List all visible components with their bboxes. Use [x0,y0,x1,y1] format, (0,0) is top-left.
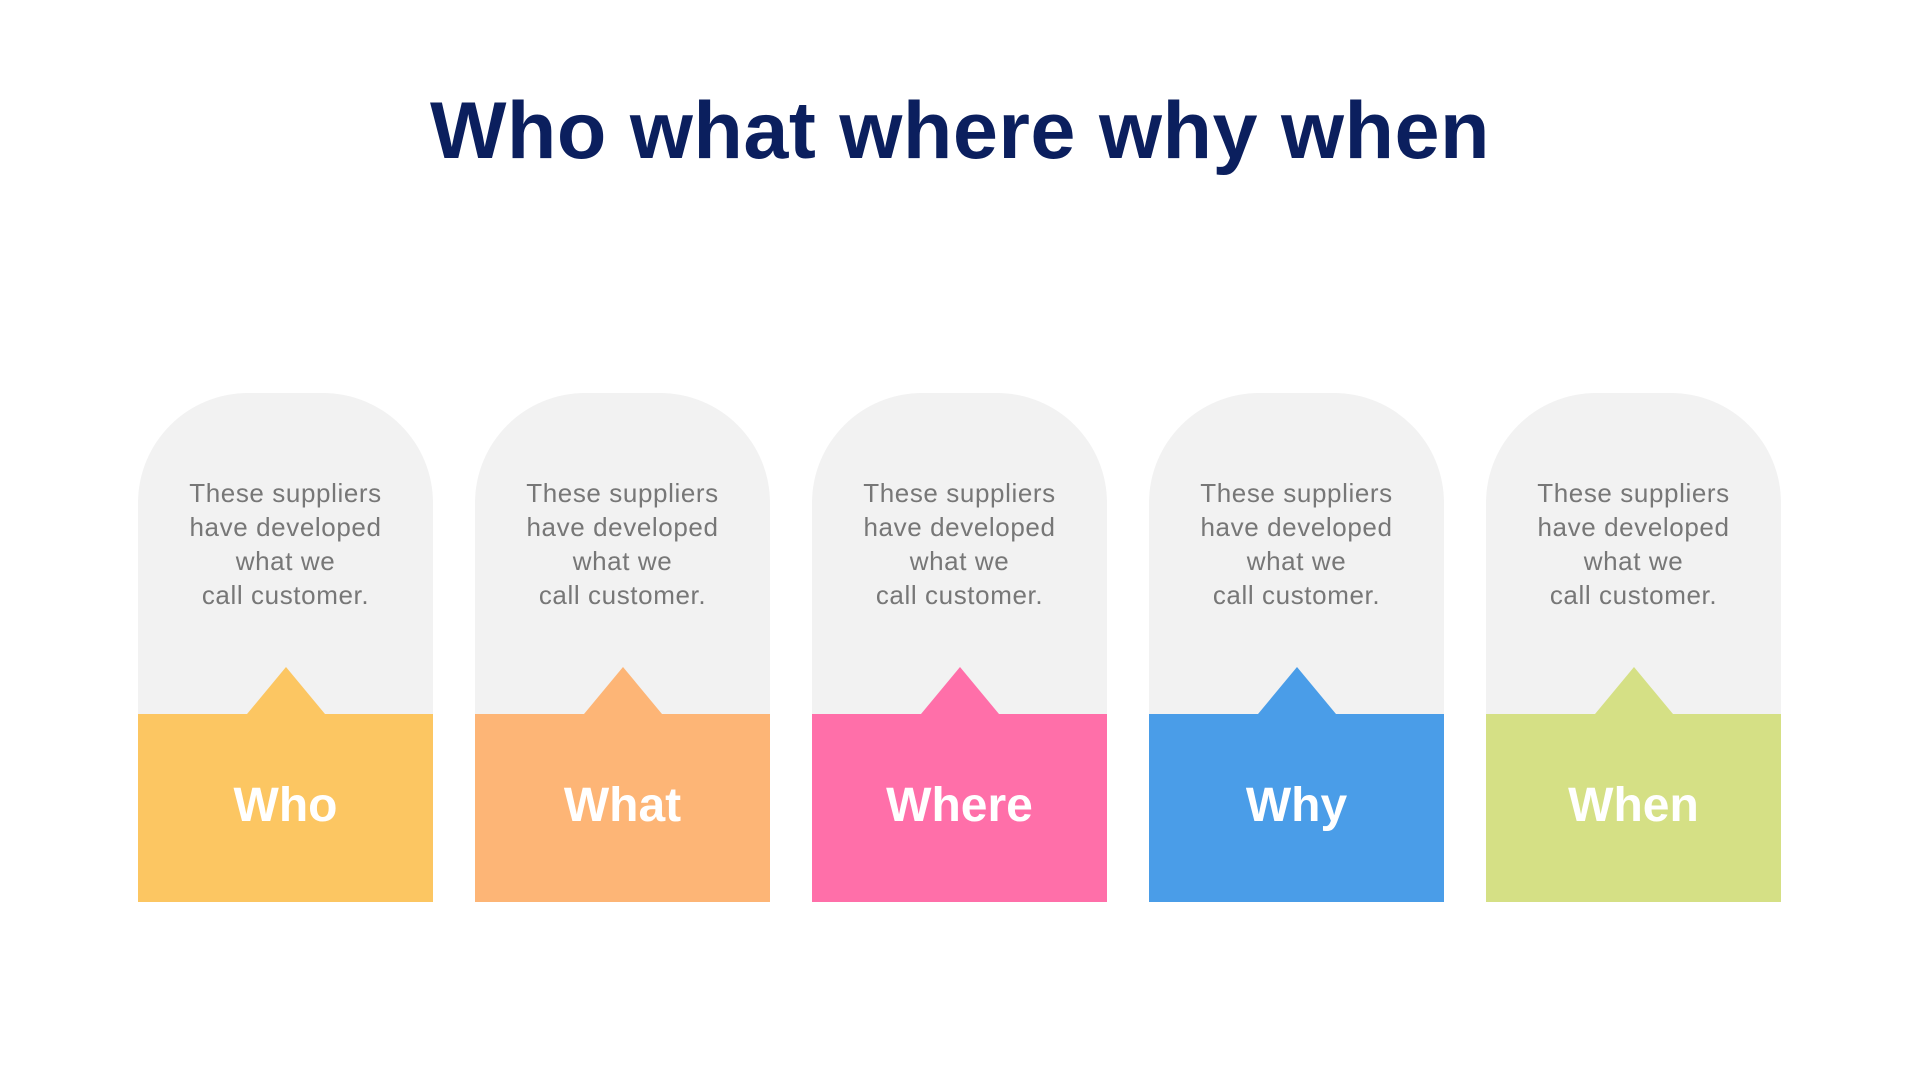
band: what [475,714,770,902]
text: when: have developed [1538,512,1730,542]
text: where: These suppliers [863,478,1056,508]
title: Who what where why when [430,86,1490,176]
text: when: These suppliers [1537,478,1730,508]
pointer: when [1595,667,1673,714]
band: who [138,714,433,902]
text: when [1537,478,1730,610]
text: where: what we [910,546,1009,576]
pointer: why [1258,667,1336,714]
text: when: call customer. [1550,580,1717,610]
text: why [1200,478,1393,610]
card: why [1149,393,1444,902]
text: who: These suppliers [189,478,382,508]
card: when [1486,393,1781,902]
label: what: What [564,779,681,832]
text: why: what we [1247,546,1346,576]
text: where [863,478,1056,610]
label: why: Why [1246,779,1347,832]
text: why: These suppliers [1200,478,1393,508]
text: why: have developed [1200,512,1392,542]
pointer: what [584,667,662,714]
text: who: call customer. [202,580,369,610]
card: where [812,393,1107,902]
label: where: Where [886,779,1033,832]
text: what: call customer. [539,580,706,610]
text: who [189,478,382,610]
text: when: what we [1584,546,1683,576]
band: when [1486,714,1781,902]
pointer: who [247,667,325,714]
text: what: These suppliers [526,478,719,508]
card: who [138,393,433,902]
text: who: what we [236,546,335,576]
text: what: what we [573,546,672,576]
text: what [526,478,719,610]
label: who: Who [234,779,337,832]
label: when: When [1568,779,1699,832]
text: why: call customer. [1213,580,1380,610]
band: where [812,714,1107,902]
text: what: have developed [526,512,718,542]
pointer: where [921,667,999,714]
text: where: have developed [864,512,1056,542]
text: who: have developed [190,512,382,542]
band: why [1149,714,1444,902]
text: where: call customer. [876,580,1043,610]
card: what [475,393,770,902]
